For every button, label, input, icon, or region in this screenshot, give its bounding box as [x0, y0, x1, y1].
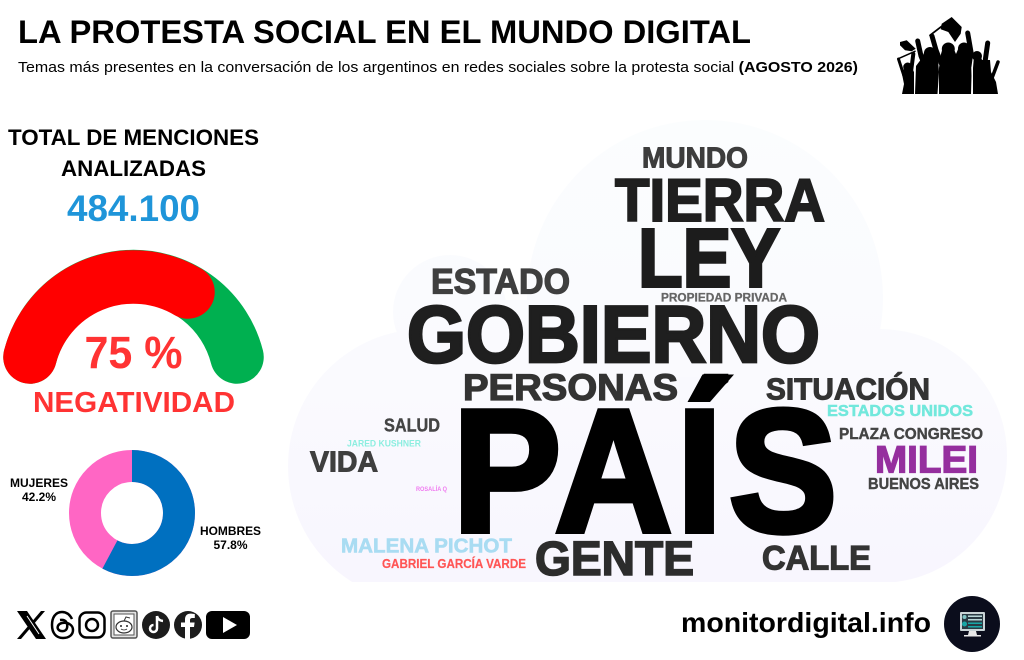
- word: PLAZA CONGRESO: PLAZA CONGRESO: [839, 426, 983, 443]
- label: women: 42.2%: [22, 490, 56, 504]
- icon: Reddit: [111, 611, 137, 638]
- icon: YouTube: [206, 611, 250, 639]
- word: LEY: LEY: [638, 212, 780, 304]
- word: TIERRA: TIERRA: [615, 167, 825, 234]
- word: MILEI: MILEI: [875, 440, 978, 482]
- label: men: HOMBRES: [200, 524, 261, 538]
- icon: Instagram: [80, 612, 104, 638]
- icon: TikTok: [142, 611, 170, 639]
- word: SITUACIÓN: SITUACIÓN: [766, 370, 930, 406]
- word: GABRIEL GARCÍA VARDE: GABRIEL GARCÍA VARDE: [382, 556, 526, 571]
- label: women: MUJERES: [10, 476, 68, 490]
- word: MALENA PICHOT: MALENA PICHOT: [341, 535, 512, 557]
- icon: Threads: [52, 612, 73, 638]
- word: PERSONAS: PERSONAS: [463, 367, 678, 408]
- word: ESTADO: ESTADO: [431, 262, 570, 302]
- total mentions block: ANALIZADAS: [61, 156, 206, 181]
- label: women: [10, 476, 68, 504]
- website url: monitordigital.info: [681, 607, 931, 638]
- word cloud: [310, 142, 983, 586]
- word: GOBIERNO: GOBIERNO: [407, 290, 820, 380]
- gauge value: 75 %: [84, 327, 182, 378]
- icon: Facebook: [174, 611, 202, 639]
- subtitle: Temas más presentes en la conversación de los argentinos en redes sociales sobre la protesta social (AGOSTO 2026): [18, 60, 858, 76]
- word: ROSALÍA Q: ROSALÍA Q: [416, 485, 447, 493]
- word cloud shape: [306, 532, 980, 582]
- gauge label: NEGATIVIDAD: [33, 387, 235, 419]
- word: CALLE: CALLE: [762, 539, 871, 577]
- total mentions block: [8, 125, 259, 229]
- title: LA PROTESTA SOCIAL EN EL MUNDO DIGITAL: [18, 14, 751, 50]
- icon: X: [17, 611, 46, 639]
- icon: monitor: [944, 596, 1000, 652]
- word: GENTE: GENTE: [535, 533, 694, 586]
- label: men: [200, 524, 261, 552]
- donut chart: gender: [10, 466, 261, 560]
- word: JARED KUSHNER: JARED KUSHNER: [347, 438, 421, 448]
- word: MUNDO: MUNDO: [642, 142, 748, 174]
- label: men: 57.8%: [214, 538, 248, 552]
- word: VIDA: VIDA: [310, 446, 378, 478]
- social media icons: [17, 611, 250, 639]
- word: PAÍS: PAÍS: [453, 374, 837, 568]
- word: BUENOS AIRES: BUENOS AIRES: [868, 476, 979, 493]
- gauge: negativity: [30, 277, 237, 419]
- word: PROPIEDAD PRIVADA: PROPIEDAD PRIVADA: [661, 290, 787, 304]
- total mentions label: TOTAL DE MENCIONES: [8, 125, 259, 150]
- word: SALUD: SALUD: [384, 416, 440, 436]
- total mentions value: 484.100: [67, 188, 200, 229]
- word: ESTADOS UNIDOS: ESTADOS UNIDOS: [827, 403, 973, 420]
- icon: protest crowd: [898, 17, 998, 94]
